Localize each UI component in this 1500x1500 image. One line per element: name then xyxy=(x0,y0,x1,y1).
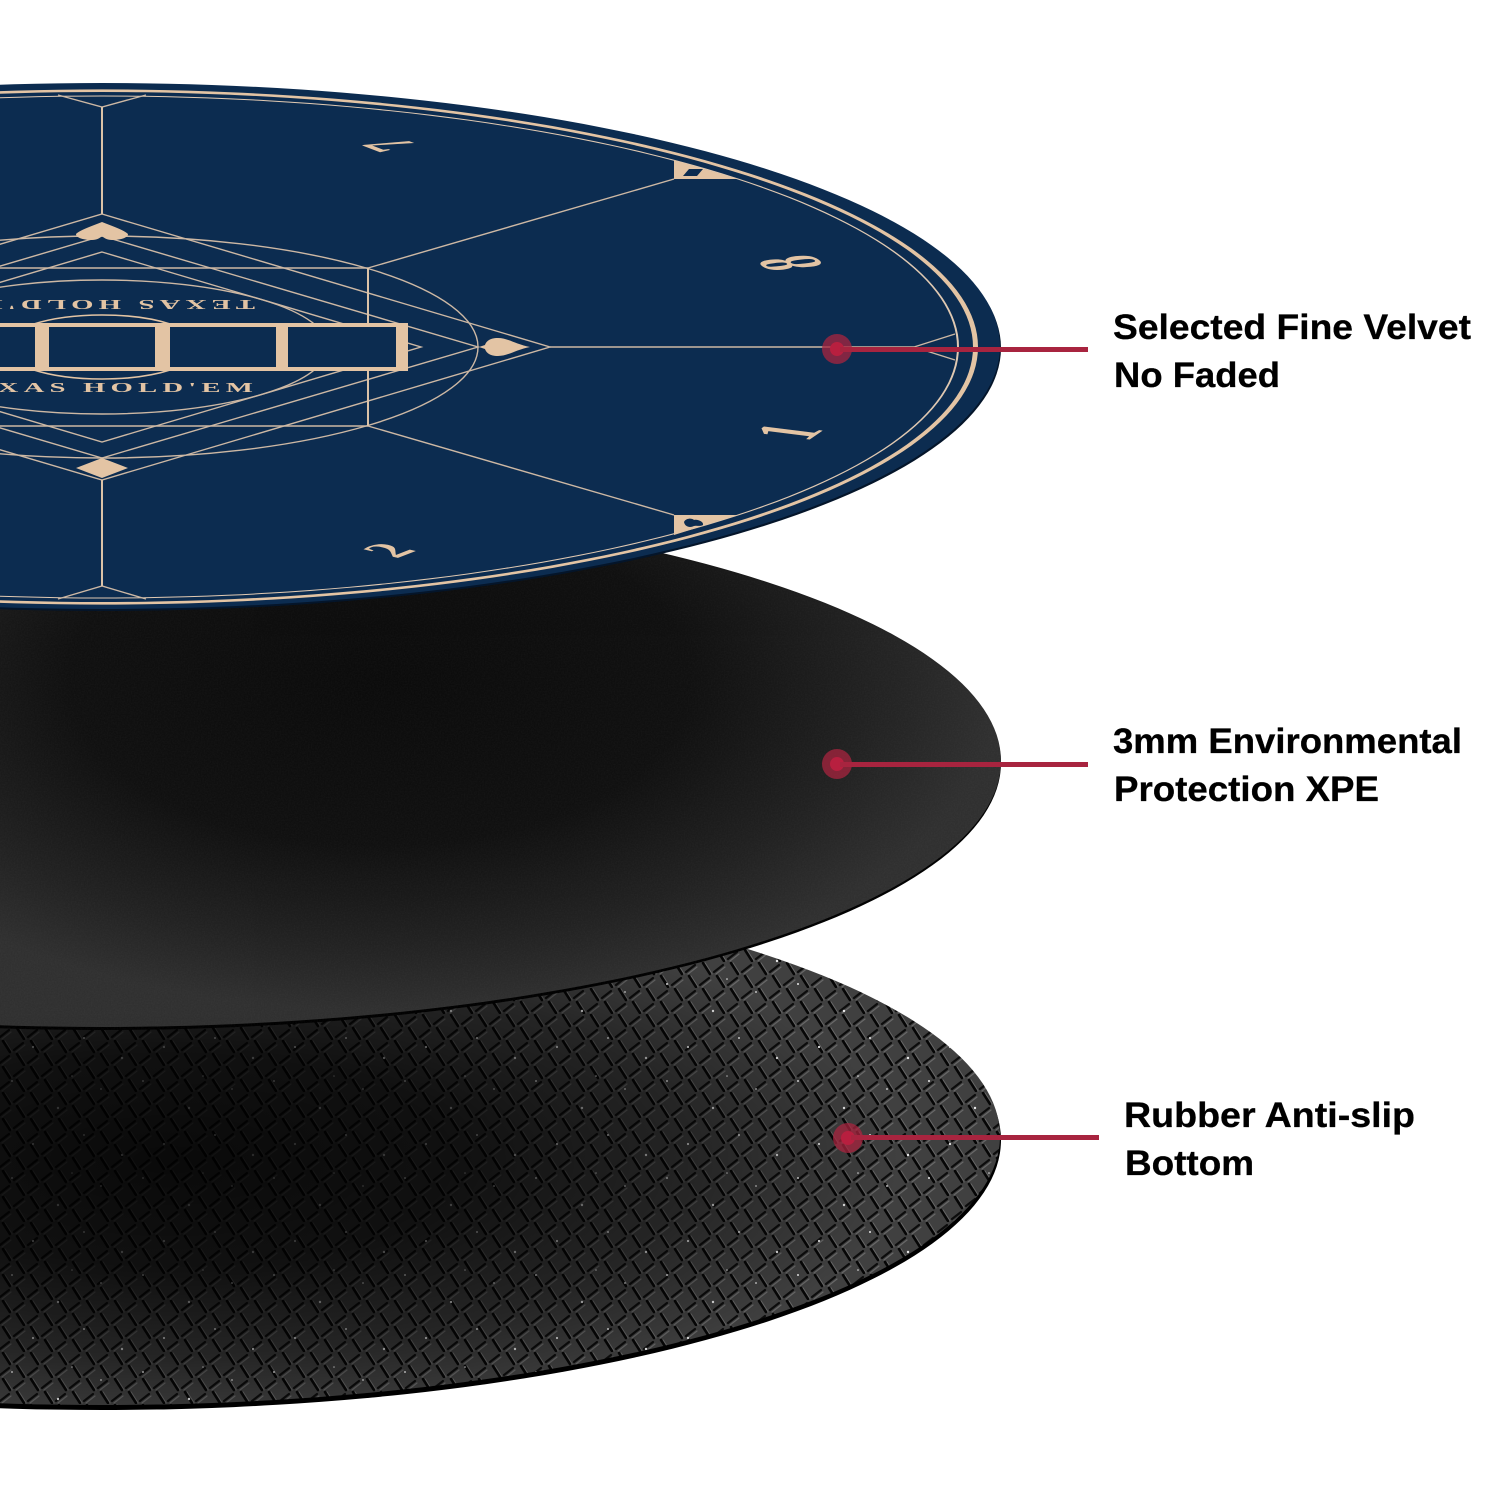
seat number 8: 8 xyxy=(736,251,845,274)
small centre ellipse xyxy=(4,315,200,379)
label: No Faded xyxy=(1114,356,1280,395)
board card boxes xyxy=(0,323,408,371)
pointer line xyxy=(840,347,1088,352)
disc edge xyxy=(0,85,1001,611)
label: Protection XPE xyxy=(1114,770,1379,809)
pointer line xyxy=(840,762,1088,767)
layer: XPE foam middle disc xyxy=(0,553,1001,1030)
label: 3mm Environmental xyxy=(1113,722,1462,761)
disc surface xyxy=(0,83,1000,609)
pointer line xyxy=(851,1135,1099,1140)
seat number 2: 2 xyxy=(348,539,430,562)
icon: heart suit xyxy=(76,222,128,240)
label: Selected Fine Velvet xyxy=(1113,308,1471,347)
seat number 1: 1 xyxy=(734,420,843,444)
label xyxy=(1113,722,1462,809)
printed text: TEXAS HOLD'EM top: TEXAS HOLD'EM xyxy=(0,296,255,311)
outer cream ring xyxy=(0,89,978,605)
pointer dot xyxy=(822,334,852,364)
label xyxy=(1124,1096,1415,1183)
pointer dot xyxy=(833,1123,863,1153)
pointer dot xyxy=(822,749,852,779)
label: Rubber Anti-slip xyxy=(1124,1096,1415,1135)
icon: dealer marker diamond xyxy=(674,160,738,179)
layer: rubber anti-slip bottom disc xyxy=(0,867,1001,1410)
icon: dealer marker club xyxy=(674,515,738,535)
icon: diamond suit xyxy=(76,458,128,478)
icon: spade suit xyxy=(479,338,530,356)
inner thin ring xyxy=(0,95,959,598)
seat number 7: 7 xyxy=(349,133,431,156)
label xyxy=(1113,308,1471,395)
callout: rubber xyxy=(833,1096,1415,1183)
callout: XPE xyxy=(822,722,1462,809)
table line work xyxy=(0,95,955,599)
layer: navy velvet top disc xyxy=(0,83,1001,611)
label: Bottom xyxy=(1125,1144,1254,1183)
callout: velvet xyxy=(822,308,1471,395)
